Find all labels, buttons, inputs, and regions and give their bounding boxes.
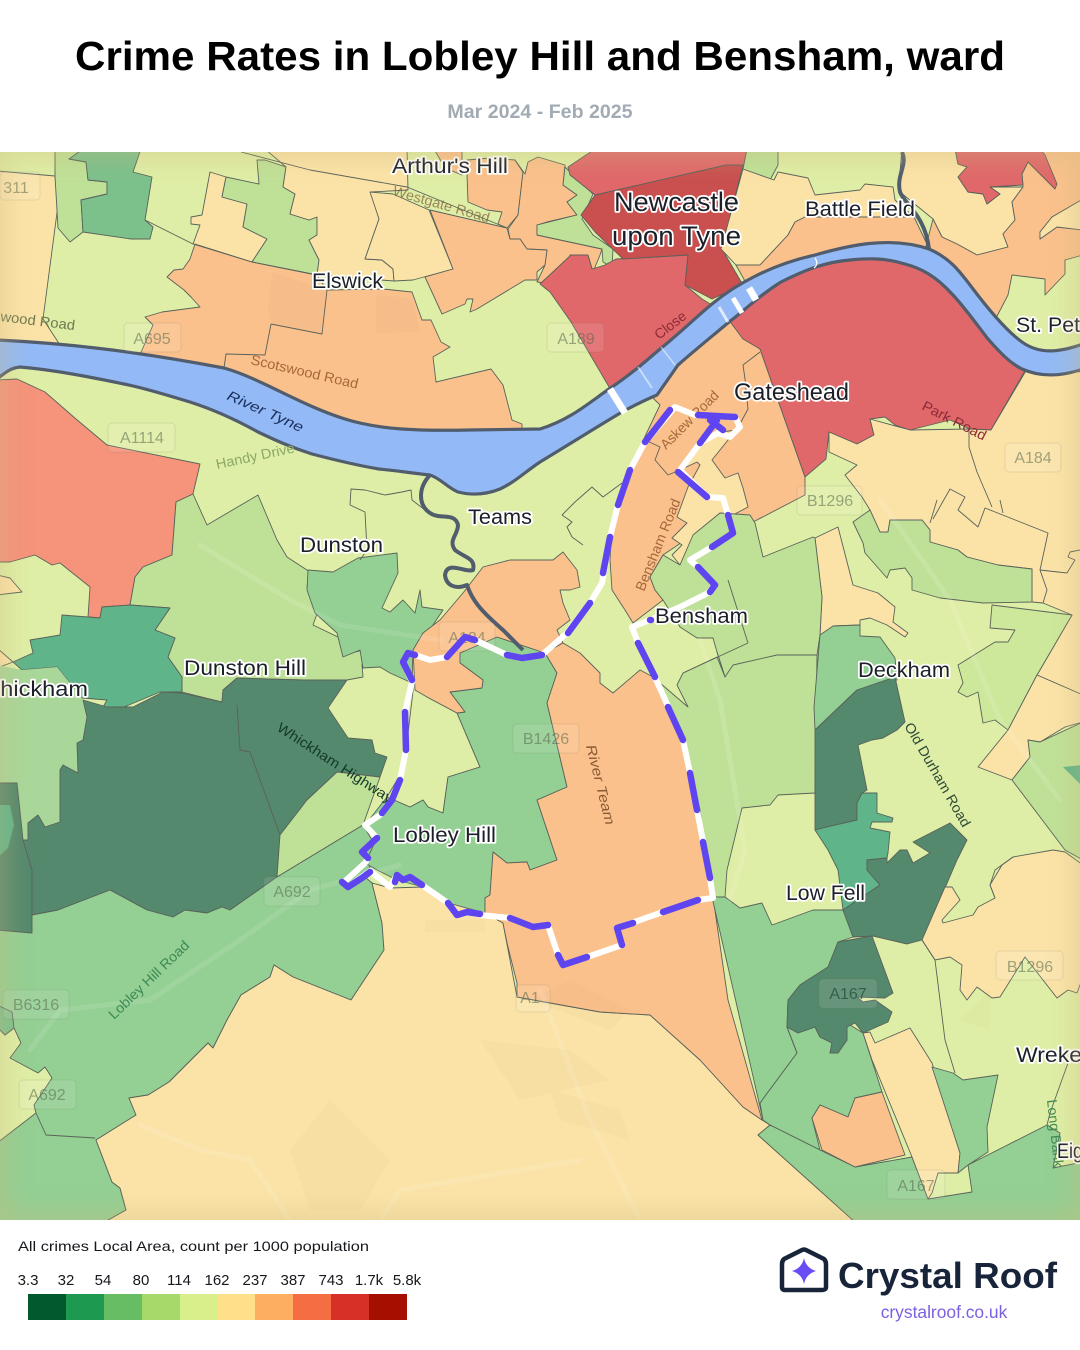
river: north tributary (899, 152, 929, 249)
place name labels: St. Pet (1016, 314, 1080, 337)
legend title: All crimes Local Area, count per 1000 population (18, 1238, 369, 1254)
choropleth map (0, 152, 1080, 1220)
map: thin area boundaries (23, 152, 1080, 1138)
road number badges: A167 (897, 1178, 935, 1195)
ward boundary: purple dashes (342, 410, 735, 965)
legend scale values: 54 (95, 1272, 111, 1289)
place name labels: Bensham (655, 605, 748, 628)
map: area polygons coloured by crime rate (0, 149, 1080, 1223)
road and river name labels: Long Bank (1044, 1099, 1067, 1169)
place name labels: Dunston (300, 534, 383, 557)
place name labels: Deckham (858, 659, 950, 682)
legend scale values: 114 (167, 1272, 191, 1289)
legend scale values: 3.3 (18, 1272, 38, 1289)
road and river name labels: Westgate Road (391, 183, 492, 225)
road number badges: B6316 (13, 997, 59, 1014)
logo: Crystal Roof (780, 1247, 1058, 1322)
legend colour bar (28, 1294, 407, 1320)
road and river name labels: Bensham Road (632, 496, 683, 593)
place name labels: Lobley Hill (393, 824, 496, 847)
place name labels: Elswick (312, 270, 383, 293)
place name labels: Teams (468, 506, 532, 529)
legend scale values: 32 (58, 1272, 74, 1289)
legend scale values: 162 (204, 1272, 230, 1289)
place name labels: Battle Field (805, 198, 915, 221)
legend scale values: 1.7k (355, 1272, 384, 1289)
road and river name labels: Whickham Highway (274, 719, 396, 806)
road number badges: A189 (557, 331, 595, 348)
river: River Tyne (0, 243, 1080, 494)
road number badges: A695 (133, 331, 171, 348)
map: faint built-up patches (290, 920, 990, 1210)
map edge vignette (0, 152, 1080, 1220)
road and river name labels: Close (651, 307, 689, 342)
legend scale values: 387 (280, 1272, 306, 1289)
road number badges: 311 (3, 180, 29, 197)
road and river name labels: Scotswood Road (249, 351, 360, 392)
road and river name labels (0, 183, 1067, 1169)
road and river name labels: Old Durham Road (901, 720, 974, 830)
place name labels: Newcastle (614, 187, 739, 217)
place name labels (0, 155, 1080, 1163)
river: River Team tributary (421, 475, 523, 650)
place name labels: Wreke (1016, 1044, 1080, 1067)
place name labels: Gateshead (734, 379, 849, 406)
road number badges: B1296 (1007, 959, 1053, 976)
road number badges: A184 (1014, 450, 1052, 467)
legend scale values: 743 (318, 1272, 344, 1289)
map: pale road network (30, 500, 1060, 1220)
legend scale values: 5.8k (393, 1272, 422, 1289)
road and river name labels: wood Road (0, 308, 76, 333)
subtitle: date range: Mar 2024 - Feb 2025 (447, 101, 633, 123)
road and river name labels: River Tyne (225, 387, 306, 435)
road number badges: A692 (273, 884, 311, 901)
road and river name labels: Askew Road (657, 387, 722, 452)
road number badges: A692 (28, 1087, 66, 1104)
logo url: crystalroof.co.uk (881, 1302, 1008, 1322)
ward boundary: white underlay (342, 407, 740, 965)
road and river name labels: River Team (583, 743, 619, 827)
road number badges: B1296 (807, 493, 853, 510)
road number badges: A167 (829, 986, 867, 1003)
road number badges: A1 (520, 990, 540, 1007)
road and river name labels: Lobley Hill Road (105, 937, 192, 1022)
icon: house with star (782, 1250, 826, 1290)
road and river name labels: Handy Drive (214, 440, 296, 472)
place name labels: Low Fell (786, 882, 865, 905)
legend scale values (18, 1272, 422, 1289)
road number badges: A184 (448, 630, 486, 647)
road number badges: A1114 (120, 430, 164, 447)
legend (18, 1238, 422, 1320)
title: Crime Rates in Lobley Hill and Bensham, ward (75, 33, 1005, 79)
road number badges (0, 172, 1063, 1199)
bridges over the Tyne (610, 258, 817, 413)
road number badges: B1426 (523, 731, 569, 748)
place name labels: upon Tyne (612, 221, 741, 251)
legend scale values: 80 (133, 1272, 149, 1289)
road and river name labels: Park Road (920, 397, 989, 443)
place name labels: Dunston Hill (184, 657, 306, 680)
legend scale values: 237 (242, 1272, 268, 1289)
logo wordmark: Crystal Roof (838, 1255, 1058, 1296)
place name labels: Arthur's Hill (392, 155, 508, 178)
